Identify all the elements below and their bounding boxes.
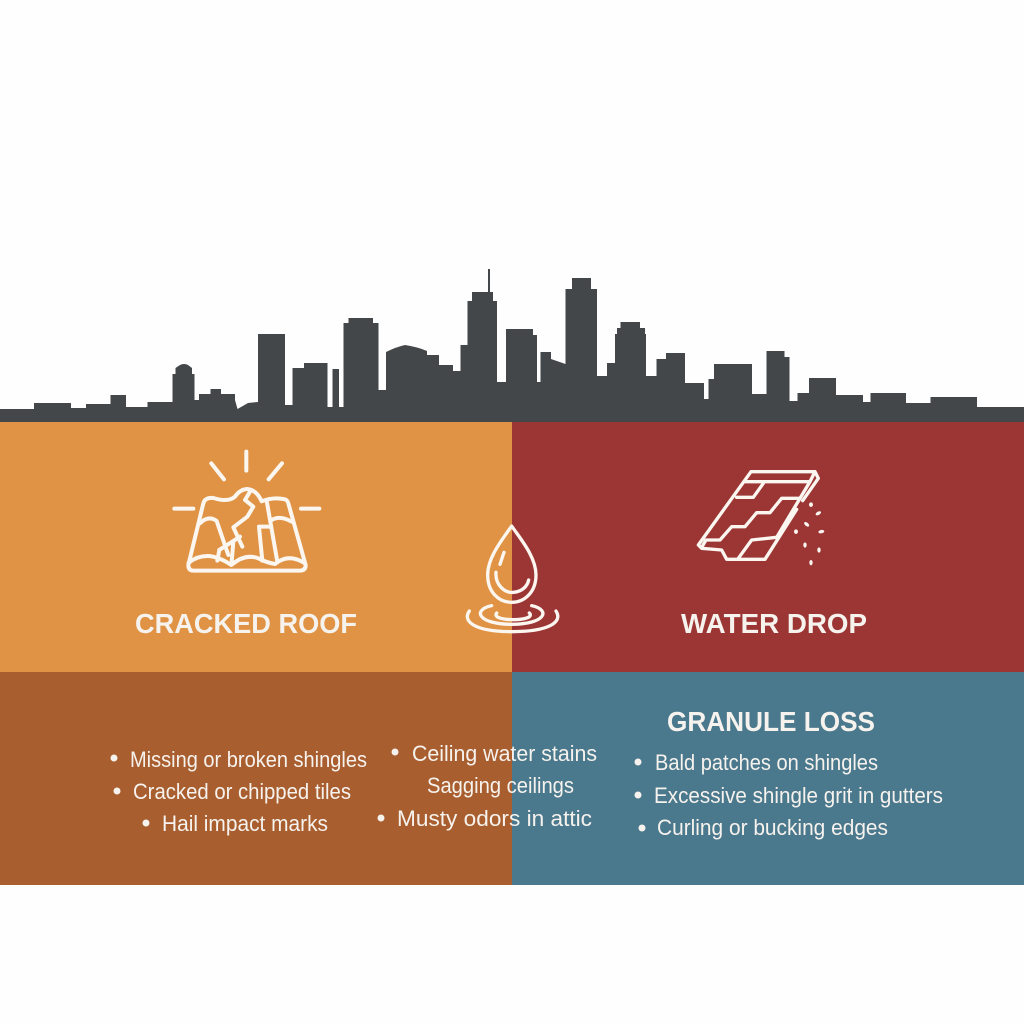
- list: water damage signs: Musty odors in attic: [397, 806, 592, 831]
- heading: granule loss: GRANULE LOSS: [667, 706, 875, 737]
- heading: water drop: WATER DROP: [681, 608, 867, 639]
- panel: granule loss, teal: [512, 672, 1024, 885]
- icon: water drop with ripples: [467, 526, 558, 632]
- panel: water drop: [512, 422, 1024, 672]
- list: water damage signs: Sagging ceilings: [427, 773, 574, 798]
- icon: cracked roof: [174, 452, 319, 571]
- list: roof damage signs: Hail impact marks: [162, 811, 328, 836]
- list: granule loss signs: Curling or bucking edges: [657, 815, 888, 840]
- list: granule loss signs: Excessive shingle grit in gutters: [654, 783, 943, 808]
- city skyline silhouette: [0, 269, 1024, 423]
- list: granule loss signs: Bald patches on shingles: [655, 750, 878, 775]
- list: roof damage signs: Missing or broken shingles: [130, 747, 367, 772]
- heading: cracked roof: CRACKED ROOF: [135, 608, 357, 639]
- list: roof damage signs: Cracked or chipped tiles: [133, 779, 351, 804]
- list: water damage signs: Ceiling water stains: [412, 741, 597, 766]
- list: water damage signs: [378, 741, 597, 831]
- list: granule loss signs: [634, 750, 943, 840]
- panel: cracked roof: [0, 422, 512, 672]
- list: roof damage signs: [110, 747, 367, 836]
- icon: shingle with falling granules: [698, 472, 825, 565]
- panel: damage list, brown: [0, 672, 512, 885]
